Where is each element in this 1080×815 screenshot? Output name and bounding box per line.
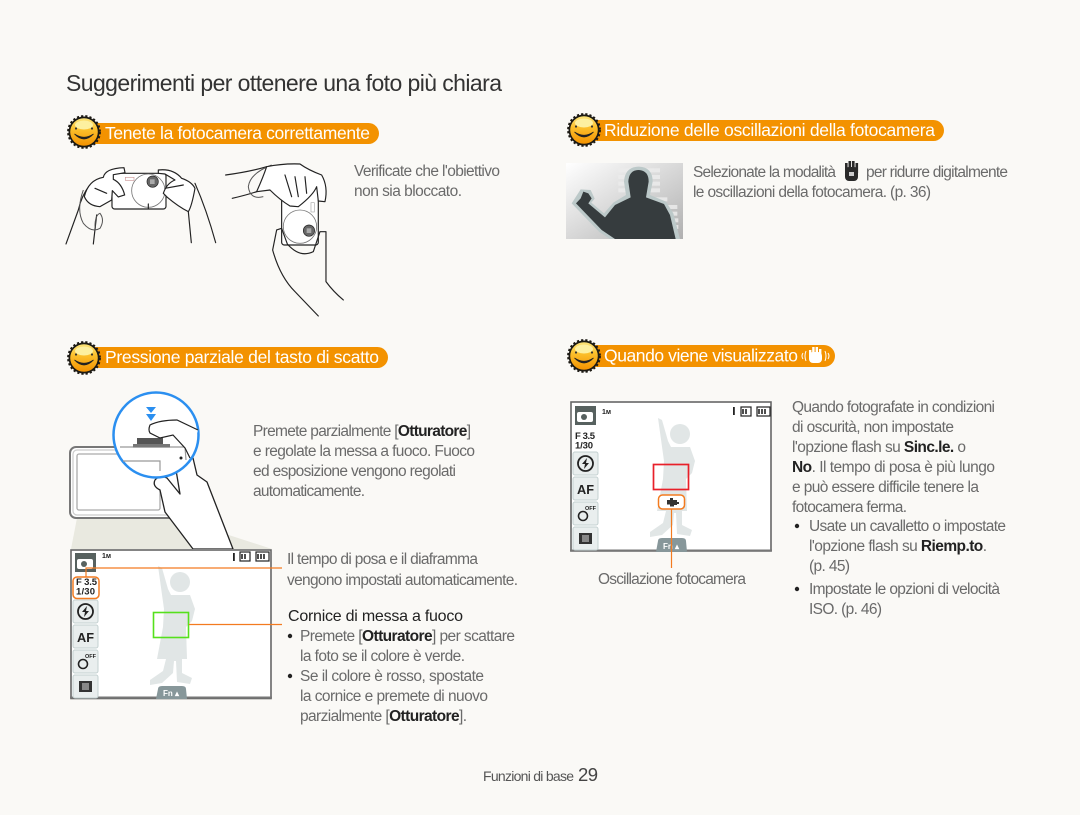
text: half press instructions: e regolate la messa a fuoco. Fuoco: [253, 443, 475, 460]
text: lens check: [354, 163, 500, 200]
camera screen: focus frame: 1м: [102, 553, 111, 560]
battery and memory: [240, 552, 269, 561]
camera screen: focus frame: AF: [77, 630, 94, 645]
text: focus frame notes: Se il colore è rosso, spostate: [300, 668, 484, 685]
F-number: 1/30: [575, 440, 593, 452]
camera back: [70, 447, 182, 518]
footer: section and page number: Funzioni di base: [483, 768, 574, 784]
text: low-light advice: l'opzione flash su Sinc.le. o: [792, 439, 966, 456]
text: low-light advice: fotocamera ferma.: [792, 499, 907, 516]
camera screen: shake warning: 1м: [602, 409, 611, 416]
F-number: F 3.5: [76, 577, 98, 588]
text: low-light advice: Usate un cavalletto o impostate: [809, 518, 1006, 535]
text: focus frame notes: la cornice e premete di nuovo: [300, 688, 488, 705]
mode icon: [75, 553, 96, 572]
text: focus frame notes: Premete [Otturatore] per scattare: [300, 628, 515, 645]
heading: Tenete la fotocamera correttamente: [68, 116, 379, 148]
text: focus frame notes: la foto se il colore è verde.: [300, 648, 465, 665]
text: low-light advice: l'opzione flash su Riemp.to.: [809, 538, 987, 555]
text: exposure note: Il tempo di posa e il diaframma: [287, 551, 478, 568]
camera screen: focus frame: Fn ▴: [163, 689, 180, 698]
F-number: [575, 431, 596, 452]
caption: camera shake: Oscillazione fotocamera: [598, 571, 746, 588]
callout: aperture and shutter box with leader line: [73, 568, 282, 598]
text: exposure note: vengono impostati automaticamente.: [287, 572, 518, 589]
beige projection cone: [71, 517, 272, 549]
text: low-light advice: [792, 399, 1006, 618]
battery and memory: [741, 407, 770, 416]
text: half press instructions: automaticamente.: [253, 483, 365, 500]
camera screen: focus frame: OFF: [85, 654, 97, 660]
camera screen: shake warning: Fn ▴: [663, 542, 680, 551]
text: shake reduction mode: [693, 161, 1008, 201]
F-number: [76, 577, 98, 598]
text: low-light advice: Impostate le opzioni di velocità: [809, 581, 1000, 598]
text: low-light advice: e può essere difficile tenere la: [792, 479, 979, 496]
text: focus frame notes: Cornice di messa a fuoco: [288, 608, 463, 625]
camera screen: shake warning: OFF: [585, 506, 597, 512]
callout: green focus frame with leader line: [154, 612, 282, 638]
text: low-light advice: Quando fotografate in condizioni: [792, 399, 995, 416]
Fn tab: [656, 538, 687, 552]
text: shake reduction mode: per ridurre digitalmente: [866, 164, 1008, 181]
text: half press instructions: [253, 423, 475, 500]
Fn tab: [156, 686, 187, 699]
heading: Quando viene visualizzato: Quando viene visualizzato: [604, 346, 798, 366]
footer: section and page number: 29: [578, 764, 598, 785]
heading: Riduzione delle oscillazioni: Riduzione delle oscillazioni della fotocamera: [604, 120, 935, 140]
text: low-light advice: ISO. (p. 46): [809, 601, 882, 618]
text: half press instructions: Premete parzialmente [Otturatore]: [253, 423, 471, 440]
text: low-light advice: No. Il tempo di posa è più lungo: [792, 459, 995, 476]
illustration: two hands holding camera: [66, 164, 343, 316]
text: shake reduction mode: le oscillazioni della fotocamera. (p. 36): [693, 184, 931, 201]
text: low-light advice: di oscurità, non impostate: [792, 419, 954, 436]
text: lens check: non sia bloccato.: [354, 183, 462, 200]
text: focus frame notes: [288, 608, 515, 725]
second hold: [226, 167, 267, 175]
illustration: half-pressing shutter: [70, 392, 272, 549]
heading: Quando viene visualizzato: [568, 340, 835, 372]
icon: white hand: [802, 347, 829, 363]
text: shake reduction mode: Selezionate la modalità: [693, 164, 836, 181]
camera screen: focus frame: [70, 549, 272, 699]
heading: Tenete la fotocamera correttamente: Tenete la fotocamera correttamente: [105, 123, 370, 143]
mode icon: [575, 406, 596, 425]
text: lens check: Verificate che l'obiettivo: [354, 163, 500, 180]
heading: Pressione parziale: Pressione parziale del tasto di scatto: [105, 347, 379, 367]
silhouette child: [650, 418, 695, 537]
heading: Pressione parziale: [68, 342, 388, 374]
silhouette child: [150, 566, 195, 685]
icon: hand shake mode: [845, 161, 858, 181]
text: low-light advice: (p. 45): [809, 558, 850, 575]
camera screen: shake warning: [570, 401, 772, 552]
callout: red frame and shake indicator: [654, 464, 688, 568]
footer: section and page number: [483, 764, 598, 785]
magnifier circle: [114, 392, 198, 478]
heading: Riduzione delle oscillazioni: [568, 114, 944, 146]
text: focus frame notes: parzialmente [Otturatore].: [300, 708, 467, 725]
photo: person silhouette with camera shake: [566, 163, 683, 239]
camera screen: shake warning: AF: [577, 482, 594, 497]
text: exposure note: [287, 551, 518, 589]
F-number: F 3.5: [575, 431, 596, 442]
title: Suggerimenti per ottenere una foto più chiara: [66, 70, 502, 96]
hand: [154, 458, 233, 549]
F-number: 1/30: [76, 586, 95, 598]
text: half press instructions: ed esposizione vengono regolati: [253, 463, 456, 480]
